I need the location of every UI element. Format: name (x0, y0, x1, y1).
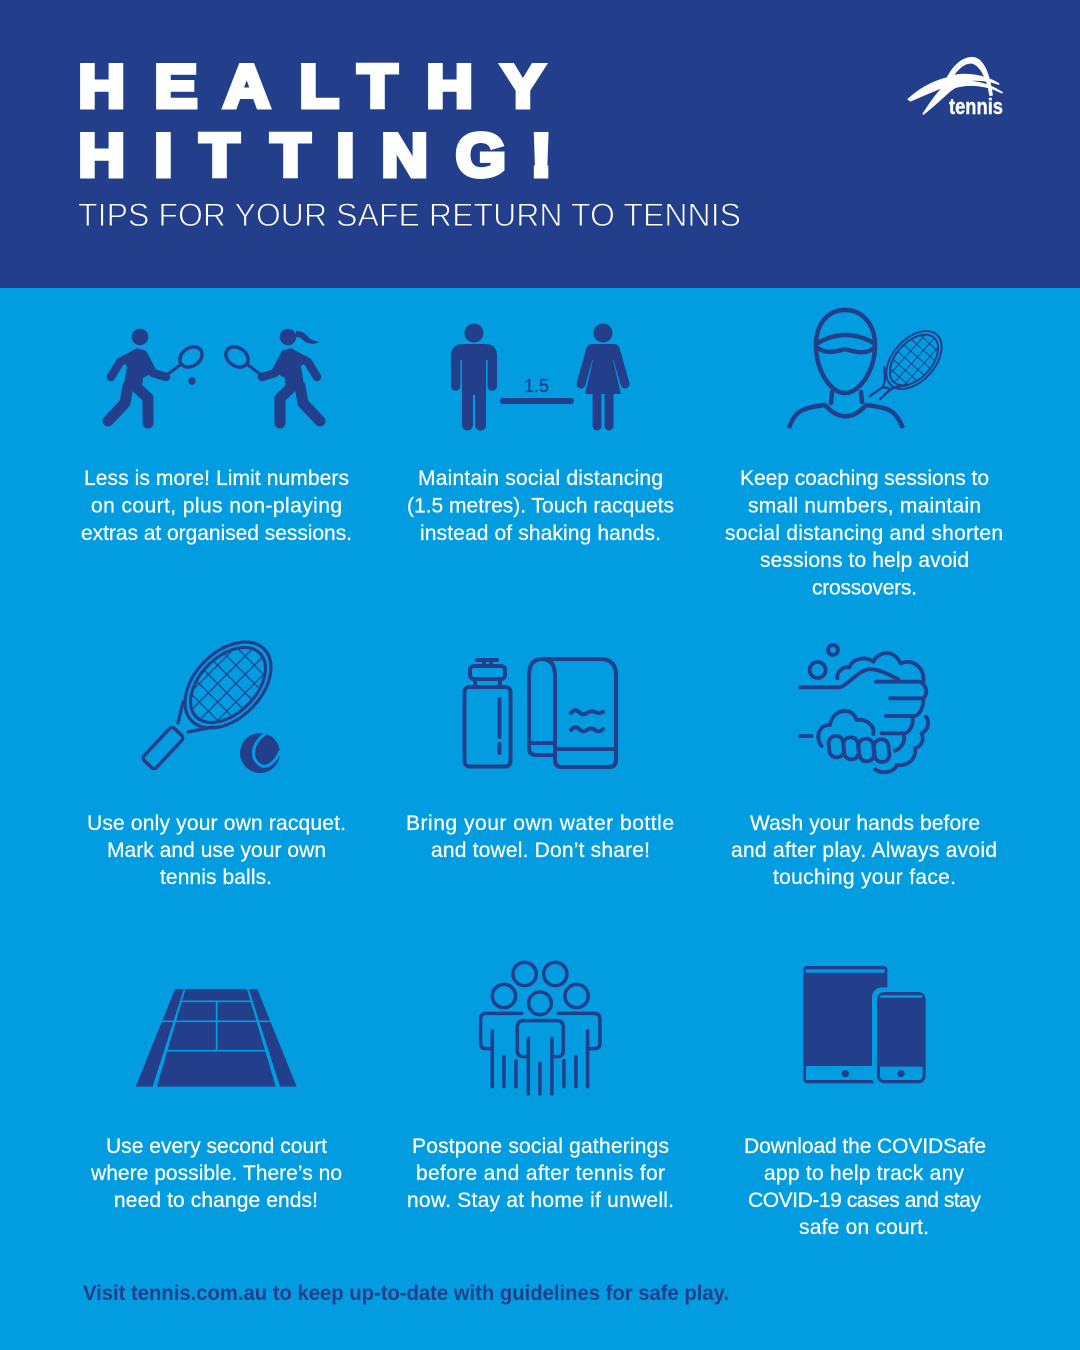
panel: own racquet (87, 626, 346, 889)
icon: tablet and phone (803, 966, 929, 1087)
text: own racquet: Mark and use your own (107, 839, 326, 862)
text: limit numbers: extras at organised sessions. (81, 522, 352, 545)
text: social gatherings: before and after tennis for (416, 1162, 665, 1185)
panel: coaching sessions (725, 310, 1003, 600)
header band (0, 0, 1080, 288)
text: social distancing: instead of shaking hands. (420, 522, 661, 545)
logo: tennis (908, 58, 1003, 119)
icon: tennis court (136, 988, 297, 1087)
text: every second court: where possible. There’s no (90, 1162, 342, 1185)
text: social gatherings: now. Stay at home if unwell. (407, 1189, 674, 1212)
title: HEALTHY (79, 54, 544, 121)
text: COVIDSafe app: Download the COVIDSafe (744, 1135, 986, 1158)
icon: towel (529, 659, 616, 767)
title: HITTING! (79, 123, 552, 190)
panel: wash hands (731, 645, 997, 889)
subtitle: TIPS FOR YOUR SAFE RETURN TO TENNIS (78, 197, 741, 233)
text: own racquet: Use only your own racquet. (87, 812, 346, 835)
text: wash hands (731, 812, 997, 889)
text: every second court (90, 1135, 342, 1212)
text: coaching sessions: Keep coaching sessions to (740, 467, 989, 490)
text: limit numbers: on court, plus non-playing (91, 494, 342, 518)
panel: every second court (90, 988, 342, 1212)
text: COVIDSafe app: safe on court. (799, 1216, 929, 1239)
text: coaching sessions (725, 467, 1003, 600)
icon: washing hands (800, 645, 928, 772)
text: own racquet (87, 812, 346, 889)
text: water bottle and towel (406, 812, 674, 862)
text: every second court: Use every second court (106, 1135, 327, 1158)
text: COVIDSafe app: app to help track any (764, 1162, 964, 1185)
panel: social gatherings (407, 962, 674, 1212)
text: wash hands: and after play. Always avoid (731, 839, 997, 862)
icon: two tennis players (108, 329, 320, 423)
text: water bottle and towel: and towel. Don’t share! (431, 839, 650, 862)
text: social gatherings (407, 1135, 674, 1212)
text: social gatherings: Postpone social gatherings (412, 1135, 669, 1158)
text: every second court: need to change ends! (114, 1189, 318, 1212)
text: COVIDSafe app (744, 1135, 986, 1239)
text: wash hands: touching your face. (773, 866, 956, 889)
text: social distancing (407, 467, 674, 545)
text: limit numbers: Less is more! Limit numbers (84, 467, 349, 490)
text: water bottle and towel: Bring your own water bottle (406, 812, 674, 835)
text: wash hands: Wash your hands before (750, 812, 980, 835)
logo: tennis: tennis (949, 94, 1003, 119)
text: coaching sessions: small numbers, maintain (748, 494, 981, 518)
panel: water bottle and towel (406, 659, 674, 862)
panel: limit numbers (81, 329, 352, 545)
icon: two people 1.5 metres apart: 1.5 (524, 376, 549, 396)
icon: racquet and ball (142, 626, 287, 773)
text: coaching sessions: crossovers. (812, 576, 917, 600)
text: limit numbers (81, 467, 352, 545)
text: social distancing: (1.5 metres). Touch racquets (407, 494, 674, 518)
text: own racquet: tennis balls. (160, 866, 272, 889)
title (79, 54, 552, 190)
text: social distancing: Maintain social distancing (418, 467, 663, 490)
text: coaching sessions: social distancing and shorten (725, 522, 1003, 545)
panel: social distancing (407, 324, 674, 545)
icon: coach with visor and racquet (789, 310, 952, 428)
text: coaching sessions: sessions to help avoid (760, 549, 969, 572)
icon: group of people (481, 962, 600, 1094)
text: COVIDSafe app: COVID-19 cases and stay (748, 1189, 982, 1212)
panel: COVIDSafe app (744, 966, 986, 1239)
icon: bottle (464, 660, 510, 766)
footer note: Visit tennis.com.au to keep up-to-date with guidelines for safe play. (83, 1282, 729, 1305)
icon: two people 1.5 metres apart (451, 324, 625, 426)
